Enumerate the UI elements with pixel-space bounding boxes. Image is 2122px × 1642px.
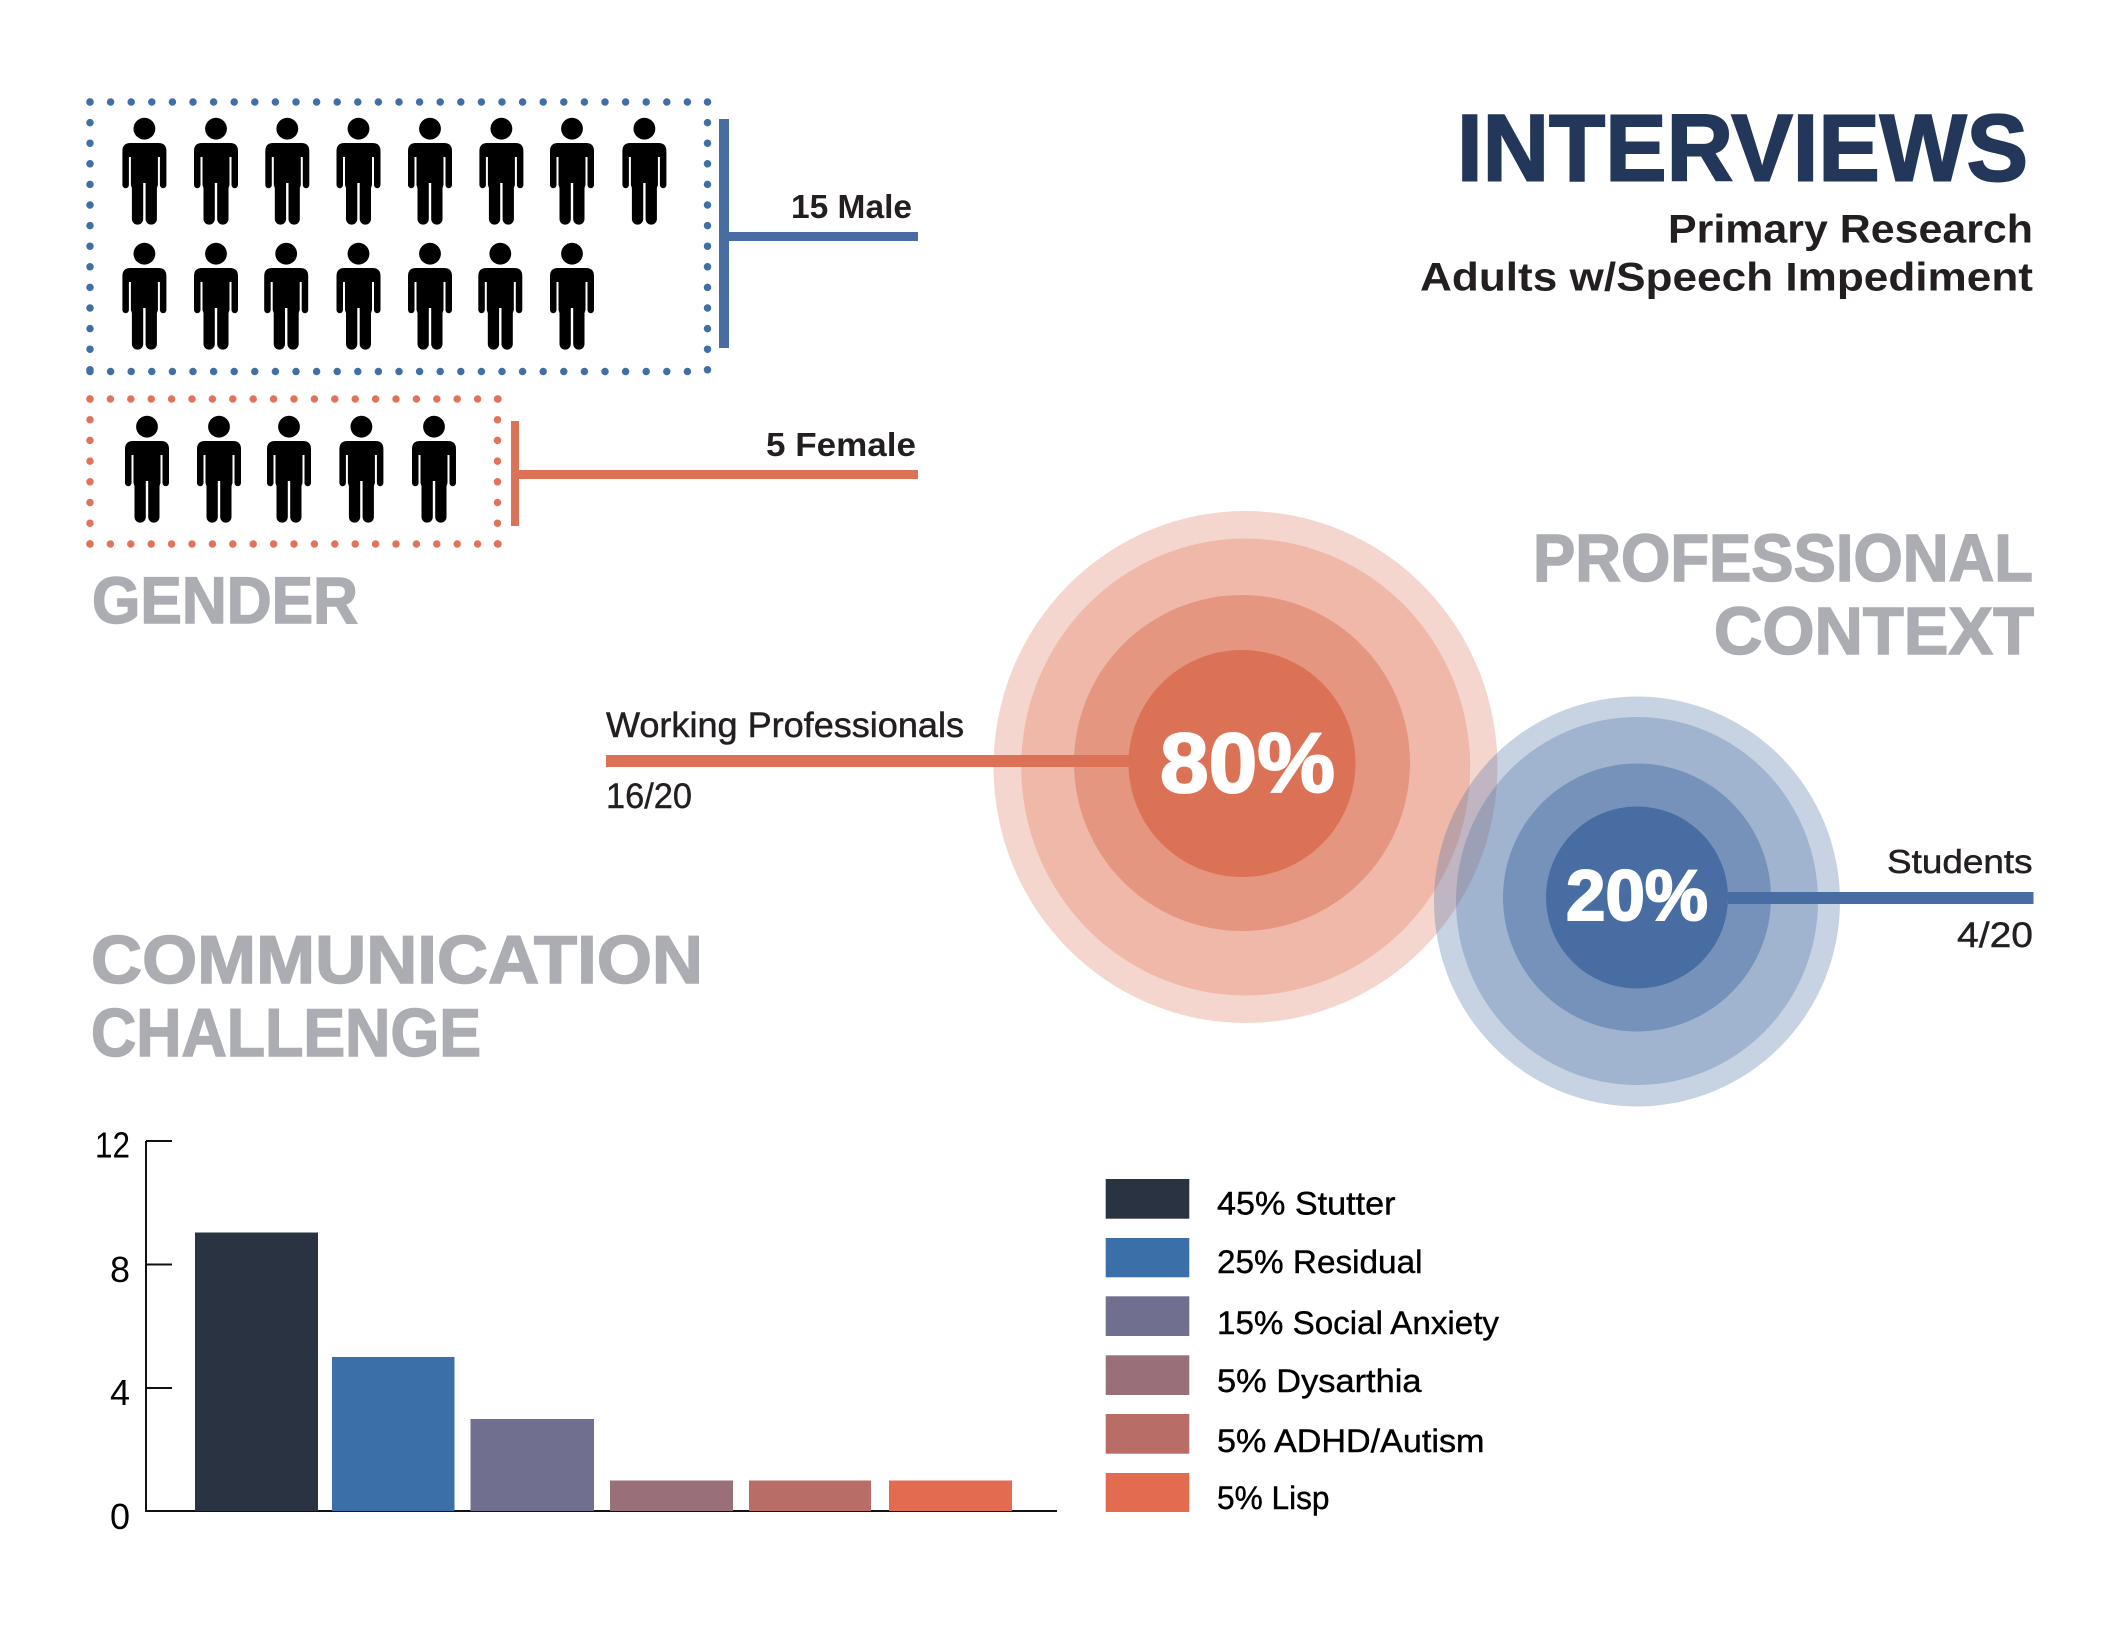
- bar chart: [95, 1124, 1057, 1537]
- male dotted frame: [90, 102, 708, 372]
- label: 16/20: 16/20: [606, 777, 692, 816]
- legend labels: 5% Dysarthia: [1217, 1363, 1422, 1399]
- gender heading: GENDER: [92, 563, 358, 637]
- bars: [195, 1232, 1012, 1511]
- subtitle line one: Primary Research: [1668, 208, 2033, 252]
- heading: CONTEXT: [1714, 594, 2034, 669]
- leader line: working professionals: [606, 755, 1129, 767]
- legend labels: 5% ADHD/Autism: [1217, 1423, 1484, 1459]
- legend labels: 45% Stutter: [1217, 1186, 1396, 1222]
- female label: 5 Female: [766, 426, 916, 463]
- panel: professional context: [606, 511, 2034, 1106]
- legend: [1106, 1179, 1499, 1516]
- panel: communication challenge: [91, 922, 1499, 1537]
- legend labels: 5% Lisp: [1217, 1480, 1330, 1516]
- concentric circles: working professionals: [994, 511, 1498, 1023]
- axis lines: [146, 1141, 1057, 1511]
- value: 20%: 20%: [1566, 857, 1708, 936]
- axis labels: 4: [110, 1372, 130, 1413]
- male label: 15 Male: [791, 188, 912, 225]
- male bracket: [719, 119, 918, 348]
- axis labels: 8: [110, 1249, 130, 1290]
- heading: [91, 922, 703, 1071]
- axis labels: [95, 1124, 130, 1537]
- heading: COMMUNICATION: [91, 922, 703, 998]
- heading: PROFESSIONAL: [1533, 521, 2033, 596]
- female people icons: [125, 416, 456, 523]
- label: 4/20: 4/20: [1957, 916, 2033, 955]
- female dotted frame: [90, 399, 498, 544]
- male people icons: [122, 118, 666, 350]
- panel: gender: [90, 102, 918, 637]
- label: students: Students: [1887, 843, 2032, 880]
- legend labels: 25% Residual: [1217, 1244, 1422, 1280]
- title block: [1420, 96, 2033, 300]
- heading: [1533, 521, 2034, 669]
- value: 80%: 80%: [1160, 716, 1335, 810]
- female bracket: [511, 421, 918, 526]
- legend labels: 15% Social Anxiety: [1217, 1305, 1499, 1341]
- axis labels: 12: [95, 1124, 130, 1166]
- heading: CHALLENGE: [91, 995, 481, 1071]
- subtitle line two: Adults w/Speech Impediment: [1420, 256, 2033, 300]
- leader line: students: [1728, 892, 2034, 904]
- axis labels: 0: [110, 1496, 130, 1537]
- legend swatches: [1106, 1179, 1189, 1512]
- title: INTERVIEWS: [1457, 96, 2028, 202]
- legend labels: [1217, 1186, 1499, 1516]
- concentric circles: students: [1434, 696, 1840, 1106]
- label: working professionals: Working Professionals: [606, 706, 964, 745]
